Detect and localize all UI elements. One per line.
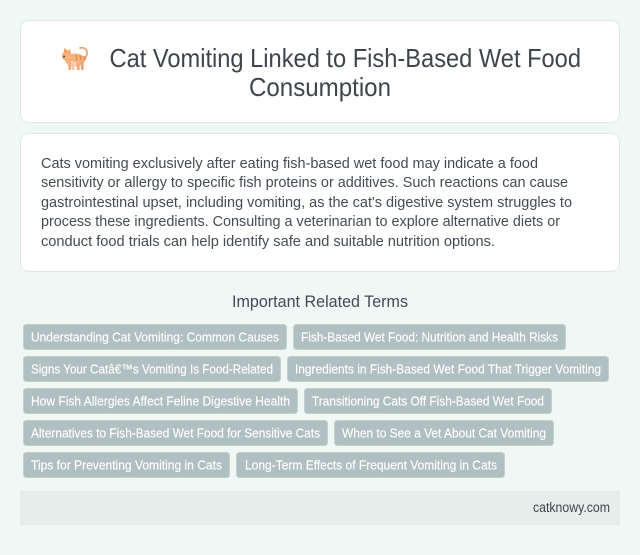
chip xyxy=(24,356,280,382)
text block: description: process these ingredients. Consulting a veterinarian to explore alternative diets or xyxy=(41,213,560,230)
title: Cat Vomiting Linked to Fish-Based Wet Food xyxy=(110,43,581,73)
panel: description xyxy=(20,134,620,272)
chip: When to See a Vet About Cat Vomiting xyxy=(342,426,546,440)
chip xyxy=(288,356,608,382)
chip: Long-Term Effects of Frequent Vomiting in Cats xyxy=(245,458,497,472)
chip: Ingredients in Fish-Based Wet Food That Trigger Vomiting xyxy=(295,362,601,376)
chip xyxy=(24,452,230,478)
chip: Signs Your Catâ€™s Vomiting Is Food-Related xyxy=(31,362,273,376)
text block: description: conduct food trials can help identify safe and suitable nutrition options. xyxy=(41,233,495,250)
chip: Fish-Based Wet Food: Nutrition and Health Risks xyxy=(301,330,558,344)
text block: description: sensitivity or allergy to specific fish proteins or additives. Such reactions can cause xyxy=(41,174,568,191)
heading: related terms: Important Related Terms xyxy=(232,293,408,311)
title xyxy=(110,43,581,102)
chip xyxy=(334,420,554,446)
chip: Understanding Cat Vomiting: Common Causes xyxy=(31,330,279,344)
chip: Tips for Preventing Vomiting in Cats xyxy=(31,458,222,472)
footer bar xyxy=(20,491,620,525)
chip: Alternatives to Fish-Based Wet Food for Sensitive Cats xyxy=(31,426,320,440)
chip xyxy=(304,388,552,414)
text block: description: Cats vomiting exclusively after eating fish-based wet food may indicate a food xyxy=(41,155,538,172)
title: Consumption xyxy=(249,72,391,102)
panel: title card xyxy=(20,20,620,122)
chip xyxy=(24,420,328,446)
icon: cat xyxy=(62,48,87,70)
chip: How Fish Allergies Affect Feline Digestive Health xyxy=(31,394,290,408)
chip: Transitioning Cats Off Fish-Based Wet Food xyxy=(312,394,544,408)
footer source text: catknowy.com xyxy=(533,500,610,515)
chip xyxy=(24,324,286,350)
chip xyxy=(24,388,298,414)
chip xyxy=(236,452,504,478)
text block: description: gastrointestinal upset, including vomiting, as the cat's digestive system struggles to xyxy=(41,194,572,211)
chip xyxy=(294,324,566,350)
text block: description xyxy=(41,155,572,250)
panel: related term chips xyxy=(24,324,608,478)
